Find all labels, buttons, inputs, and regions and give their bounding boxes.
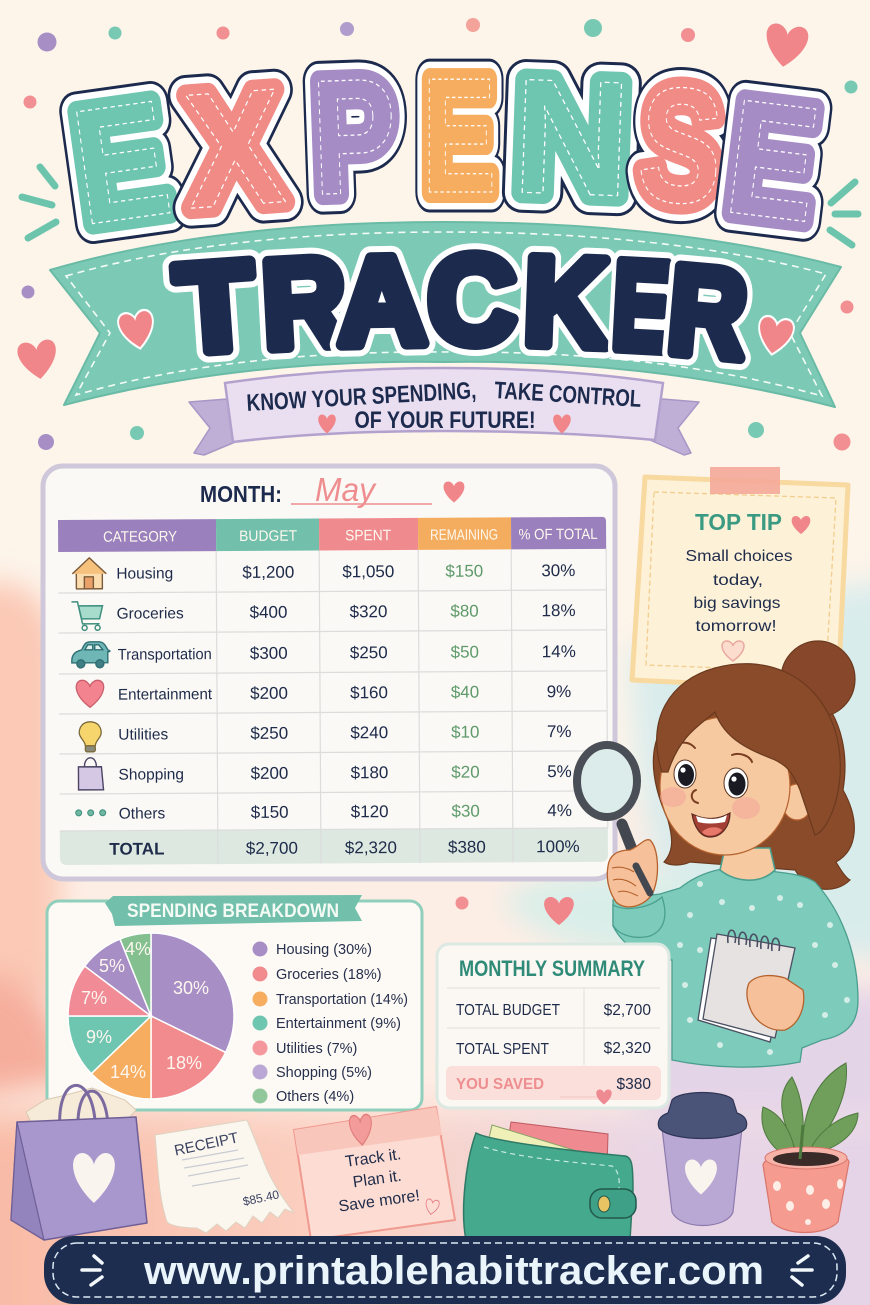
wallet clasp <box>590 1189 636 1218</box>
row: groceries: $320 <box>350 602 388 621</box>
row: utilities: Utilities <box>118 726 168 744</box>
row: others: $30 <box>451 802 480 821</box>
title letter X: X <box>179 53 289 243</box>
title letter E: E <box>63 66 180 260</box>
row: transportation: Transportation <box>118 646 212 664</box>
legend: Groceries (18%) <box>276 967 382 983</box>
note text: Plan it. <box>352 1168 403 1191</box>
tracker letter K: K <box>522 231 610 373</box>
row: total: 100% <box>536 837 580 856</box>
row: utilities: $250 <box>250 724 288 743</box>
pie labels: 5% <box>99 956 125 976</box>
row: shopping: $20 <box>451 763 480 782</box>
row: housing: $150 <box>445 562 483 581</box>
header row: SPENT <box>345 527 391 544</box>
face <box>660 717 790 855</box>
row: entertainment: 9% <box>547 682 571 701</box>
tip text: Small choices <box>686 548 792 565</box>
tracker letter R: R <box>259 231 350 375</box>
note pin heart <box>349 1114 373 1146</box>
row: groceries: 18% <box>541 601 576 620</box>
row: total: $2,320 <box>345 838 397 857</box>
row: utilities: 7% <box>547 722 572 741</box>
icon: heart <box>76 680 104 707</box>
title letter E: E <box>63 66 180 260</box>
row: others: Others <box>119 805 166 823</box>
background <box>0 570 870 1305</box>
icon: cart <box>71 602 103 630</box>
hand holding notebook <box>747 976 804 1030</box>
title letter P: P <box>309 45 399 230</box>
receipt: $85.40 <box>242 1187 281 1209</box>
footer sparkles right <box>792 1256 812 1285</box>
tip text <box>686 548 792 635</box>
sparkle strokes right <box>830 182 858 245</box>
row: shopping <box>78 755 572 790</box>
wallet <box>464 1122 636 1240</box>
header row: % OF TOTAL <box>519 526 598 543</box>
title letter S: S <box>633 51 729 240</box>
title letter N: N <box>510 43 634 231</box>
pie labels: 7% <box>81 988 107 1008</box>
header row: BUDGET <box>239 528 297 545</box>
title letter E orange: E <box>422 43 496 227</box>
pie labels: 30% <box>173 978 209 998</box>
tracker letter T: T <box>171 235 259 379</box>
legend: Others (4%) <box>276 1089 354 1105</box>
sparkle strokes left <box>22 167 56 238</box>
title letter X: X <box>179 53 289 243</box>
note text <box>338 1146 421 1216</box>
note text: Track it. <box>344 1146 402 1171</box>
subtitle text: KNOW YOUR SPENDING, <box>246 377 477 417</box>
row: total budget: TOTAL BUDGET <box>456 1002 560 1019</box>
sleeve cuff <box>613 897 665 937</box>
eyes <box>674 760 748 798</box>
pie labels: 14% <box>110 1062 146 1082</box>
website url: www.printablehabittracker.com <box>143 1249 764 1293</box>
title letter E purple: E <box>718 64 828 257</box>
row: utilities: $10 <box>451 723 479 742</box>
row: housing: 30% <box>541 561 575 580</box>
title letter X: X <box>179 53 289 243</box>
title letter P: P <box>309 45 399 230</box>
tip text: today, <box>713 572 763 589</box>
row: groceries: Groceries <box>116 605 184 623</box>
tip text: tomorrow! <box>696 618 776 635</box>
row: transportation: 14% <box>542 642 576 661</box>
row: you saved: YOU SAVED <box>456 1076 544 1093</box>
row: entertainment: $200 <box>250 684 288 703</box>
teal arched banner <box>50 222 841 407</box>
tracker letter C: C <box>428 231 516 370</box>
row: others: $120 <box>351 802 389 821</box>
title letter N: N <box>510 43 634 231</box>
icon: house <box>72 558 106 589</box>
subtitle text: TAKE CONTROL <box>494 377 642 413</box>
row: housing: Housing <box>116 565 173 583</box>
row: total: TOTAL <box>109 839 164 859</box>
bag handles <box>60 1085 108 1130</box>
legend: Utilities (7%) <box>276 1041 357 1057</box>
row: shopping: $180 <box>350 763 388 782</box>
tracker letter R: R <box>259 231 350 375</box>
row: total budget: $2,700 <box>604 1002 651 1019</box>
pie labels: 9% <box>86 1027 112 1047</box>
hair back <box>653 670 854 889</box>
month heading: May <box>315 471 377 508</box>
breakdown banner: SPENDING BREAKDOWN <box>127 901 339 922</box>
row: others: 4% <box>547 801 572 820</box>
sweater polka dots <box>617 881 850 1055</box>
header row <box>58 517 606 552</box>
mouth <box>692 813 730 837</box>
row: transportation: $300 <box>250 644 288 663</box>
row: housing: $1,200 <box>242 563 294 582</box>
pie chart <box>68 933 234 1099</box>
title letter E orange: E <box>422 43 496 227</box>
header row: REMAINING <box>430 526 498 544</box>
subtitle text: OF YOUR FUTURE! <box>354 407 536 434</box>
tracker letter R last: R <box>663 238 753 385</box>
header row: CATEGORY <box>103 528 177 546</box>
coffee cup <box>658 1092 747 1226</box>
tracker letter T: T <box>171 235 259 379</box>
tape <box>710 467 780 494</box>
eyebrows and nose <box>676 743 752 803</box>
row: groceries: $400 <box>250 603 288 622</box>
legend: Entertainment (9%) <box>276 1016 401 1032</box>
pot <box>763 1153 849 1232</box>
row: total: $2,700 <box>246 839 298 858</box>
title letter E purple: E <box>718 64 828 257</box>
row: groceries <box>71 599 576 630</box>
footer sparkles left <box>82 1256 102 1285</box>
panel: monthly summary <box>437 944 669 1108</box>
note: track it <box>294 1107 455 1240</box>
title letter E: E <box>63 66 180 260</box>
row: transportation: $50 <box>451 643 479 662</box>
magnifier grip and fingers <box>612 866 650 896</box>
title letter E orange: E <box>422 43 496 227</box>
note text: Save more! <box>338 1187 421 1216</box>
potted plant <box>762 1063 858 1232</box>
icon: light bulb <box>79 722 101 752</box>
pie labels: 18% <box>166 1053 202 1073</box>
legend: Transportation (14%) <box>276 992 408 1008</box>
title letter E orange: E <box>422 43 496 227</box>
title: TRACKER <box>171 231 753 385</box>
tissue paper <box>26 1088 136 1140</box>
footer bar <box>44 1236 846 1304</box>
row: total <box>109 837 580 859</box>
ear <box>782 784 812 820</box>
tracker letter E: E <box>609 234 675 377</box>
row: entertainment: Entertainment <box>118 686 213 704</box>
tracker letter A: A <box>337 231 427 372</box>
title letter S: S <box>633 51 729 240</box>
tracker letter E: E <box>609 234 675 377</box>
title letter E purple: E <box>718 64 828 257</box>
title letter X: X <box>179 53 289 243</box>
row: shopping: $200 <box>250 764 288 783</box>
bag heart <box>73 1153 115 1203</box>
row: you saved: $380 <box>617 1076 651 1093</box>
hair front fringe <box>657 664 840 835</box>
character: girl with magnifier <box>577 641 858 1067</box>
icon: shopping bag <box>78 758 104 790</box>
panel: spending breakdown <box>47 895 422 1110</box>
icon: car <box>72 642 110 668</box>
row: shopping: Shopping <box>118 766 184 784</box>
title letter E purple: E <box>718 64 828 257</box>
receipt <box>155 1120 294 1233</box>
row: total spent: $2,320 <box>604 1040 651 1057</box>
tip text: big savings <box>694 595 780 612</box>
tracker letter K: K <box>522 231 610 373</box>
tracker letter R last: R <box>663 238 753 385</box>
notebook <box>698 930 795 1042</box>
sweater <box>613 868 858 1067</box>
receipt: RECEIPT <box>173 1129 240 1160</box>
legend <box>252 942 408 1105</box>
row: utilities <box>79 719 572 752</box>
title letter S: S <box>633 51 729 240</box>
row: others: $150 <box>251 803 289 822</box>
table grid <box>58 517 608 865</box>
row: housing: $1,050 <box>342 562 394 581</box>
pie labels <box>81 939 209 1082</box>
banner hearts <box>118 310 794 356</box>
hair bun <box>781 641 855 717</box>
row: total spent <box>456 1040 651 1058</box>
legend: Shopping (5%) <box>276 1065 372 1081</box>
month heading: MONTH: <box>200 481 282 507</box>
row: entertainment <box>76 678 571 707</box>
legend: Housing (30%) <box>276 942 372 958</box>
breakdown banner <box>105 895 362 926</box>
row: total budget <box>456 1002 651 1019</box>
neck <box>720 848 775 880</box>
pie labels: 4% <box>125 939 151 959</box>
title letter S: S <box>633 51 729 240</box>
plant leaves <box>762 1063 858 1162</box>
title letter E: E <box>63 66 180 260</box>
row: entertainment: $160 <box>350 683 388 702</box>
tip heading: TOP TIP <box>695 509 782 535</box>
subtitle text <box>246 377 642 434</box>
row: utilities: $240 <box>350 723 388 742</box>
row: transportation: $250 <box>350 643 388 662</box>
row: transportation <box>72 639 576 668</box>
hand holding magnifier <box>607 840 657 907</box>
cup lid <box>658 1092 747 1138</box>
tracker letter A: A <box>337 231 427 372</box>
row: entertainment: $40 <box>451 683 479 702</box>
row: housing <box>72 555 575 589</box>
shopping bag <box>11 1085 147 1240</box>
title: EXPENSE <box>63 43 828 260</box>
magnifier <box>577 745 648 890</box>
wallet cards <box>484 1122 608 1180</box>
title letter P: P <box>309 45 399 230</box>
row: total spent: TOTAL SPENT <box>456 1041 549 1058</box>
month heading <box>200 471 464 508</box>
icon: three dots <box>76 810 106 816</box>
summary heading: MONTHLY SUMMARY <box>459 956 645 981</box>
title letter N: N <box>510 43 634 231</box>
row: groceries: $80 <box>450 602 479 621</box>
row: shopping: 5% <box>547 762 572 781</box>
title letter N: N <box>510 43 634 231</box>
subtitle ribbon <box>189 368 699 455</box>
row: total: $380 <box>448 838 486 857</box>
row: you saved <box>446 1066 661 1104</box>
title letter P: P <box>309 45 399 230</box>
sticky note: top tip <box>632 467 848 690</box>
cheeks <box>660 787 760 819</box>
confetti dots and hearts <box>16 18 857 925</box>
panel: expense table <box>43 466 615 879</box>
row: others <box>76 801 572 823</box>
tracker letter C: C <box>428 231 516 370</box>
